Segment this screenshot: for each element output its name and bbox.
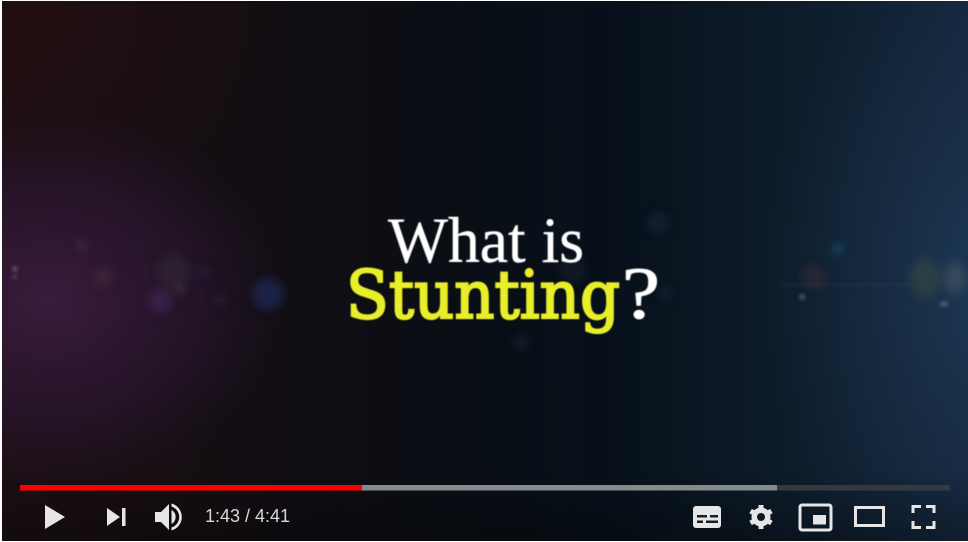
icon: next — [107, 508, 126, 526]
bokeh lights — [78, 212, 966, 352]
icon: play — [45, 505, 65, 529]
icon: volume — [155, 504, 182, 530]
small sparkles — [12, 266, 948, 306]
icon: fullscreen — [913, 506, 934, 528]
heading word: Stunting: Stunting — [346, 257, 620, 334]
player controls gradient — [2, 470, 968, 541]
icon: settings — [751, 505, 771, 529]
heading line: What is: What is — [388, 205, 584, 277]
icon: theater mode — [856, 508, 884, 526]
icon: miniplayer — [800, 505, 831, 530]
time label: 1:43 / 4:41 — [205, 506, 290, 526]
heading: What is Stunting? — [346, 205, 660, 335]
progress bar — [20, 485, 950, 490]
icon: subtitles — [693, 506, 721, 528]
question mark: ? — [622, 253, 660, 335]
